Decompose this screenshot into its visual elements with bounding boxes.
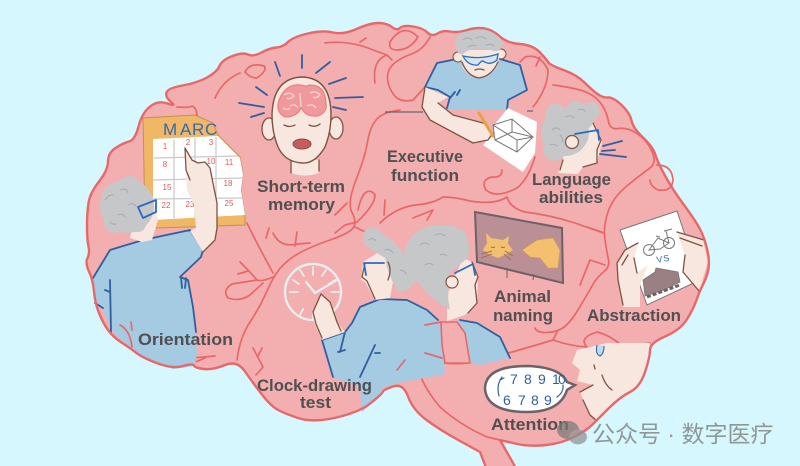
label: short-term memory — [257, 178, 345, 214]
calendar: 2 — [186, 138, 191, 147]
eye — [596, 345, 604, 356]
label: animal naming: naming — [493, 307, 553, 325]
label: executive function: function — [391, 167, 459, 185]
brain silhouette fill — [87, 23, 709, 466]
panel: attention — [485, 343, 650, 434]
shirt — [425, 59, 527, 110]
calendar — [143, 115, 245, 228]
calendar: 22 — [162, 201, 171, 210]
watermark: 公众号 · 数字医疗 — [592, 421, 773, 447]
head with glowing brain — [262, 77, 343, 176]
label: clock-drawing test: test — [300, 394, 332, 412]
label: short-term memory: Short-term — [257, 178, 345, 196]
card with bicycle versus train: VS — [656, 253, 671, 265]
label: clock-drawing test — [257, 377, 372, 412]
hands holding the card — [617, 232, 708, 307]
arm — [422, 87, 493, 143]
panel: orientation — [93, 115, 245, 369]
label: executive function — [387, 148, 463, 185]
speech bubble with numbers — [485, 366, 575, 412]
screen with cat and dog — [475, 212, 563, 283]
head — [361, 227, 416, 300]
clock — [285, 264, 341, 320]
face profile — [572, 343, 650, 420]
label: animal naming: Animal — [494, 288, 551, 306]
calendar: 10 — [207, 157, 216, 166]
head — [453, 28, 506, 78]
speech lines — [600, 141, 626, 157]
calendar: 11 — [225, 158, 234, 167]
calendar: 8 — [163, 160, 168, 169]
pencil — [479, 113, 493, 136]
label: abstraction: Abstraction — [587, 307, 681, 325]
label: orientation: Orientation — [138, 331, 233, 349]
shirt — [93, 230, 203, 369]
panel: language abilities — [532, 101, 626, 207]
panel: short-term memory — [239, 55, 363, 214]
label: language abilities: abilities — [539, 189, 603, 207]
brain folds and veins — [177, 31, 673, 440]
panel: clock-drawing test — [257, 227, 445, 412]
calendar: 25 — [225, 199, 234, 208]
calendar: MARC — [163, 120, 217, 139]
label: short-term memory: memory — [268, 196, 336, 214]
calendar: 23 — [186, 200, 195, 209]
label: attention: Attention — [491, 416, 569, 434]
speech bubble with numbers: 6789 — [503, 392, 552, 408]
panel: executive function — [385, 28, 537, 185]
pink lobe between the shirts — [441, 322, 470, 363]
hand with pencil — [313, 294, 345, 340]
brain outline — [87, 23, 709, 466]
paper with cube sketch — [483, 108, 537, 172]
icon: chat bubbles — [557, 421, 587, 444]
calendar: 3 — [209, 138, 214, 147]
panel: abstraction — [587, 211, 708, 325]
speech bubble with numbers: 78910 — [510, 371, 566, 387]
label: language abilities: Language — [532, 171, 611, 189]
shirt — [322, 299, 445, 412]
person facing the screen — [403, 225, 510, 365]
calendar: 1 — [163, 142, 168, 151]
calendar: 18 — [224, 179, 233, 188]
head — [541, 101, 602, 174]
label: animal naming — [493, 288, 553, 325]
arm and pointing hand — [185, 148, 217, 252]
panel: animal naming — [403, 212, 563, 365]
label: executive function: Executive — [387, 148, 463, 166]
calendar: 15 — [163, 183, 172, 192]
energy rays — [239, 55, 363, 117]
label: language abilities — [532, 171, 611, 207]
label: clock-drawing test: Clock-drawing — [257, 377, 372, 395]
head — [100, 176, 158, 242]
table edge — [385, 111, 533, 112]
